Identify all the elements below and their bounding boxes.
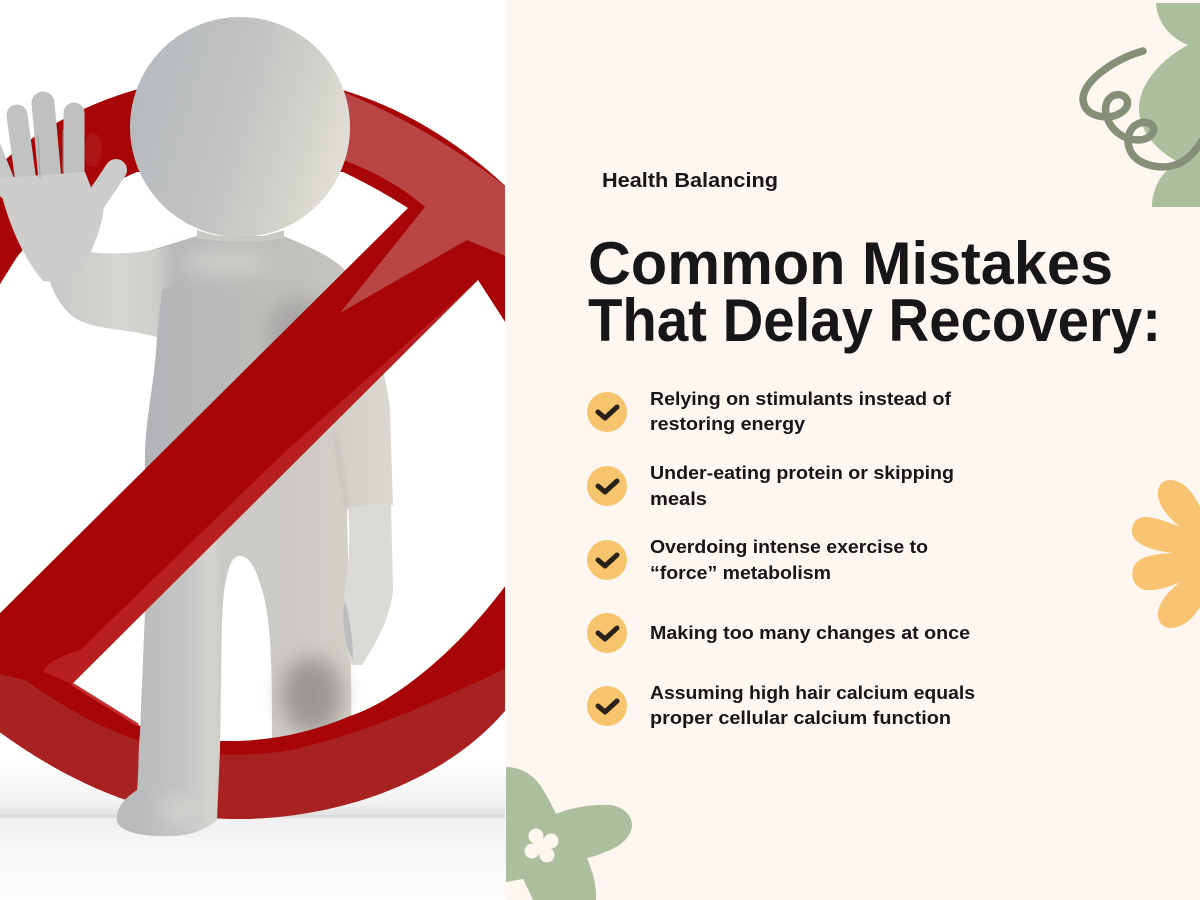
item 5 [587, 683, 975, 728]
decoration: yellow flower right edge [1132, 480, 1200, 628]
title: That Delay Recovery: [588, 287, 1161, 354]
prohibition ring and slash [0, 75, 520, 819]
item 1: restoring energy [650, 414, 805, 434]
ring thin glint [72, 684, 138, 725]
figure: raised arm and hand [0, 92, 170, 337]
ring gloss spot [84, 133, 102, 167]
slash lighter edge [44, 280, 478, 684]
item 5: proper cellular calcium function [650, 708, 951, 728]
decoration: green flower bottom left [506, 767, 632, 900]
item 2: Under-eating protein or skipping [650, 463, 954, 483]
ring upper glossy face [340, 92, 510, 313]
item 2: meals [650, 489, 707, 509]
title [588, 230, 1161, 354]
item 2 [587, 463, 954, 509]
checklist [587, 389, 975, 728]
floor shadow [0, 788, 505, 846]
figure: head [130, 17, 350, 242]
decoration: squiggle top right [1083, 51, 1200, 167]
item 5: Assuming high hair calcium equals [650, 683, 975, 703]
item 3 [587, 537, 928, 583]
eyebrow: Health Balancing: Health Balancing [602, 170, 778, 192]
decoration: green leaf top right [1139, 3, 1200, 207]
item 1: Relying on stimulants instead of [650, 389, 952, 409]
ring lower glossy face [0, 666, 510, 819]
item 3: “force” metabolism [650, 563, 831, 583]
item 3: Overdoing intense exercise to [650, 537, 928, 557]
item 4: Making too many changes at once [650, 623, 970, 643]
panel: stop sign photo [0, 0, 520, 900]
figure: torso, right arm and right leg [145, 236, 393, 738]
item 1 [587, 389, 952, 434]
item 4 [587, 613, 970, 653]
title: Common Mistakes [588, 230, 1113, 297]
figure: left leg and foot [117, 611, 222, 836]
right hand with cuff [344, 503, 393, 665]
